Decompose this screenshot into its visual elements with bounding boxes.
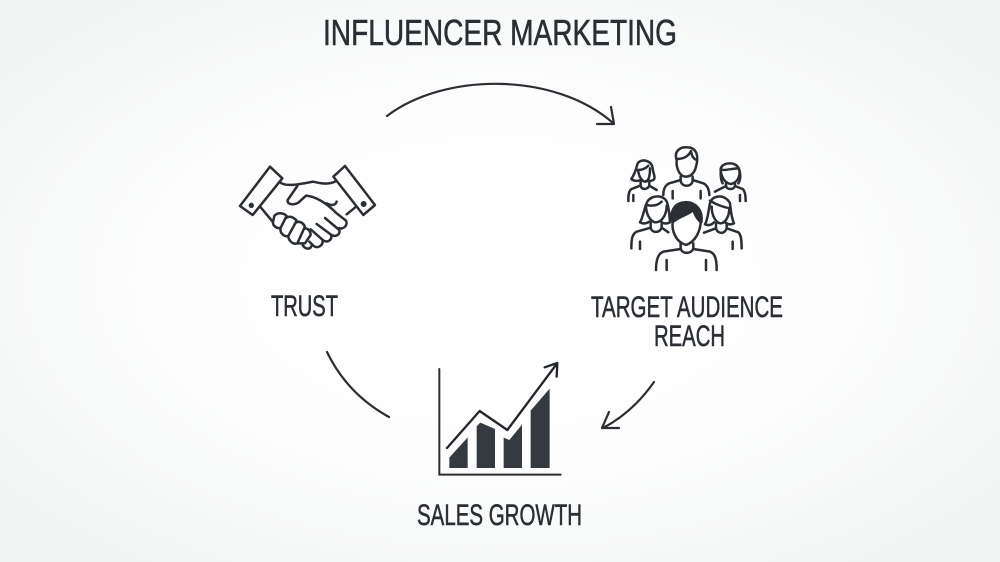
icon: sales growth chart: [439, 363, 561, 475]
title: INFLUENCER MARKETING: [323, 12, 677, 53]
person: middle right: [704, 196, 742, 249]
label: sales growth: SALES GROWTH: [417, 499, 582, 532]
person: middle left: [631, 196, 670, 249]
person: back centre: [663, 147, 709, 198]
person: back right: [715, 163, 746, 201]
label: trust: TRUST: [271, 290, 338, 323]
label: target audience reach: REACH: [654, 320, 725, 353]
arrow: audience to sales: [602, 382, 654, 428]
icon: audience group: [628, 147, 746, 270]
trend arrow: [447, 363, 557, 448]
label: target audience reach: TARGET AUDIENCE: [591, 291, 783, 324]
axes: [439, 369, 561, 475]
person: front centre: [656, 202, 717, 270]
icon: handshake: [240, 166, 375, 249]
person: back left: [628, 160, 657, 201]
arrow: sales to trust: [327, 352, 389, 417]
label: target audience reach: [591, 291, 783, 353]
bars: [449, 389, 550, 468]
arrow: trust to audience: [387, 84, 614, 124]
